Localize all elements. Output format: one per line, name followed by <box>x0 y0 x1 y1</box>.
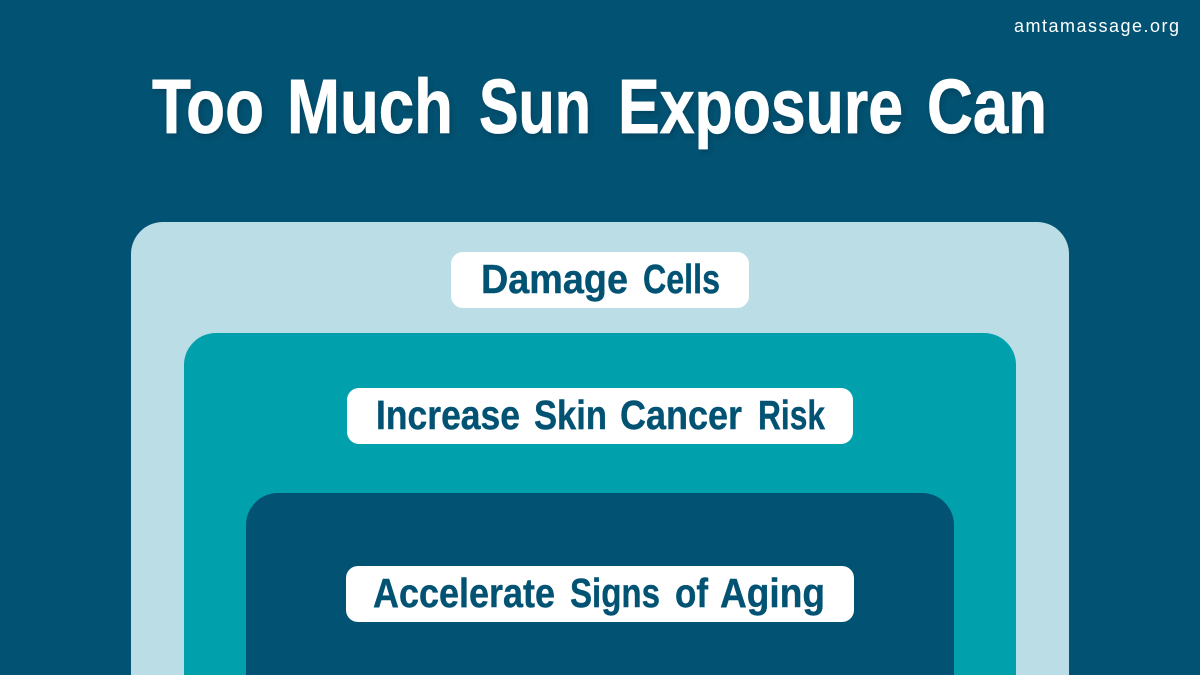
label: increase skin cancer risk: Risk <box>758 392 825 438</box>
label: increase skin cancer risk <box>347 388 853 444</box>
label: damage cells <box>451 252 749 308</box>
label: accelerate signs of aging: of <box>675 570 708 616</box>
title: Sun <box>479 64 591 150</box>
title: Can <box>927 64 1047 150</box>
label: increase skin cancer risk: Cancer <box>620 392 742 438</box>
label: accelerate signs of aging: Signs <box>570 570 660 616</box>
panel: middle layer, skin cancer risk <box>184 333 1016 675</box>
panel: inner layer, signs of aging <box>246 493 954 675</box>
label: accelerate signs of aging <box>346 566 854 622</box>
panel: outer layer, damage cells <box>131 222 1069 675</box>
label: accelerate signs of aging: Accelerate <box>373 570 555 616</box>
title: Exposure <box>618 64 903 150</box>
title: Much <box>287 64 453 150</box>
title: Too <box>152 64 264 150</box>
label: damage cells: Cells <box>643 256 720 302</box>
label: increase skin cancer risk: Increase <box>376 392 520 438</box>
label: damage cells: Damage <box>481 256 628 302</box>
label: increase skin cancer risk: Skin <box>534 392 607 438</box>
website label: amtamassage.org <box>1014 16 1179 36</box>
label: accelerate signs of aging: Aging <box>720 570 825 616</box>
